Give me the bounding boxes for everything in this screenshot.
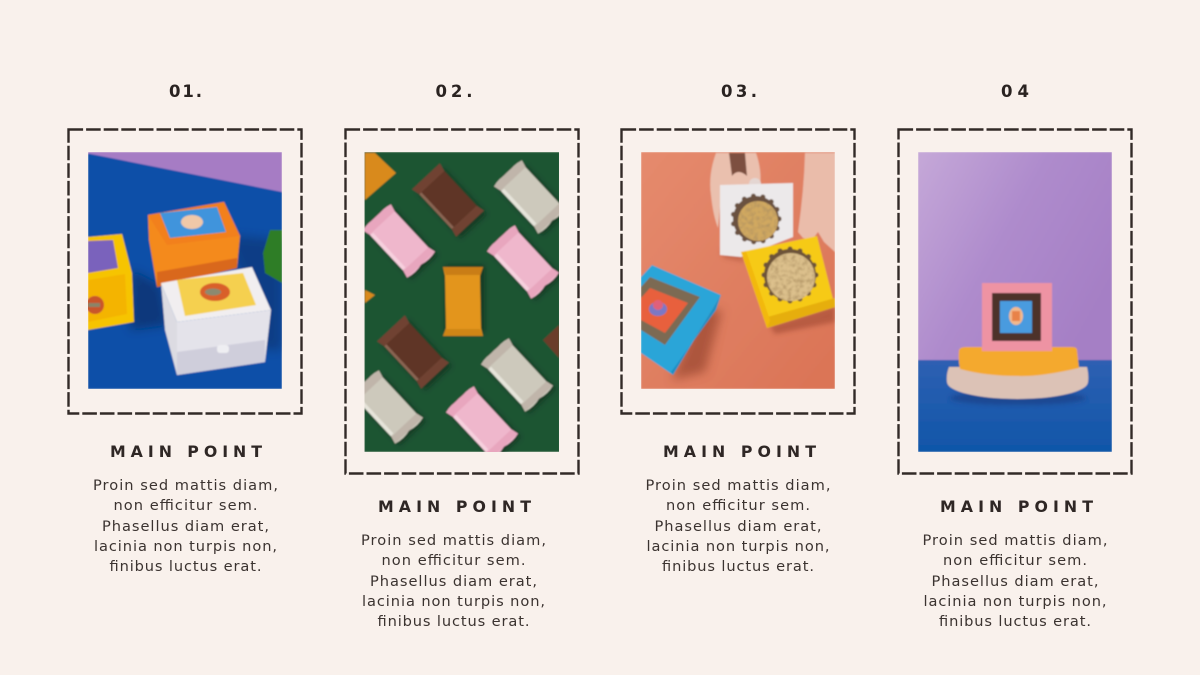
body text 01 (93, 477, 278, 575)
dashed frame 03 (622, 130, 854, 414)
bar shadows (364, 164, 559, 452)
dashed frame 01 (68, 130, 302, 414)
photo: pink box on podium (918, 152, 1112, 452)
body text 03: finibus luctus erat. (662, 558, 814, 575)
photo: gift boxes on blue (86, 152, 282, 389)
photo: hands holding cookie boxes (641, 152, 835, 389)
body text 02: finibus luctus erat. (378, 613, 530, 630)
body text 01: lacinia non turpis non, (94, 538, 277, 555)
body text 01: Proin sed mattis diam, (93, 477, 278, 494)
panel: step 03 (622, 82, 854, 575)
heading 03: MAIN POINT (663, 442, 816, 461)
scalloped window, yellow box (764, 249, 816, 301)
scalloped window, white box (733, 196, 779, 242)
body text 04 (922, 532, 1108, 630)
body text 02 (361, 532, 546, 630)
number 03: 03. (721, 82, 757, 101)
heading 04: MAIN POINT (940, 497, 1093, 516)
panel: step 01 (68, 82, 302, 575)
number 01: 01. (169, 82, 202, 101)
body text 04: finibus luctus erat. (939, 613, 1091, 630)
body text 01: non efficitur sem. (114, 497, 258, 514)
body text 03: Proin sed mattis diam, (646, 477, 830, 494)
body text 02: Phasellus diam erat, (370, 573, 537, 590)
dashed frame 02 (346, 130, 578, 474)
body text 02: lacinia non turpis non, (362, 593, 545, 610)
body text 04: non efficitur sem. (943, 552, 1087, 569)
body text 03: non efficitur sem. (666, 497, 810, 514)
body text 03: lacinia non turpis non, (646, 538, 830, 555)
body text 04: Phasellus diam erat, (932, 573, 1098, 590)
panel: step 02 (346, 82, 578, 630)
heading 02: MAIN POINT (378, 497, 531, 516)
number 02: 02. (436, 82, 472, 101)
body text 04: Proin sed mattis diam, (922, 532, 1108, 549)
body text 03 (646, 477, 830, 575)
body text 02: non efficitur sem. (382, 552, 526, 569)
heading 01: MAIN POINT (110, 442, 262, 461)
center orange bar (443, 267, 483, 336)
body text 02: Proin sed mattis diam, (361, 532, 546, 549)
body text 04: lacinia non turpis non, (924, 593, 1106, 610)
dashed frame 04 (898, 130, 1132, 474)
body text 01: finibus luctus erat. (110, 558, 262, 575)
photo: wrapped bars on green (364, 152, 559, 452)
body text 01: Phasellus diam erat, (102, 518, 269, 535)
body text 03: Phasellus diam erat, (654, 518, 822, 535)
panel: step 04 (898, 82, 1132, 630)
number 04: 04 (1001, 82, 1029, 101)
